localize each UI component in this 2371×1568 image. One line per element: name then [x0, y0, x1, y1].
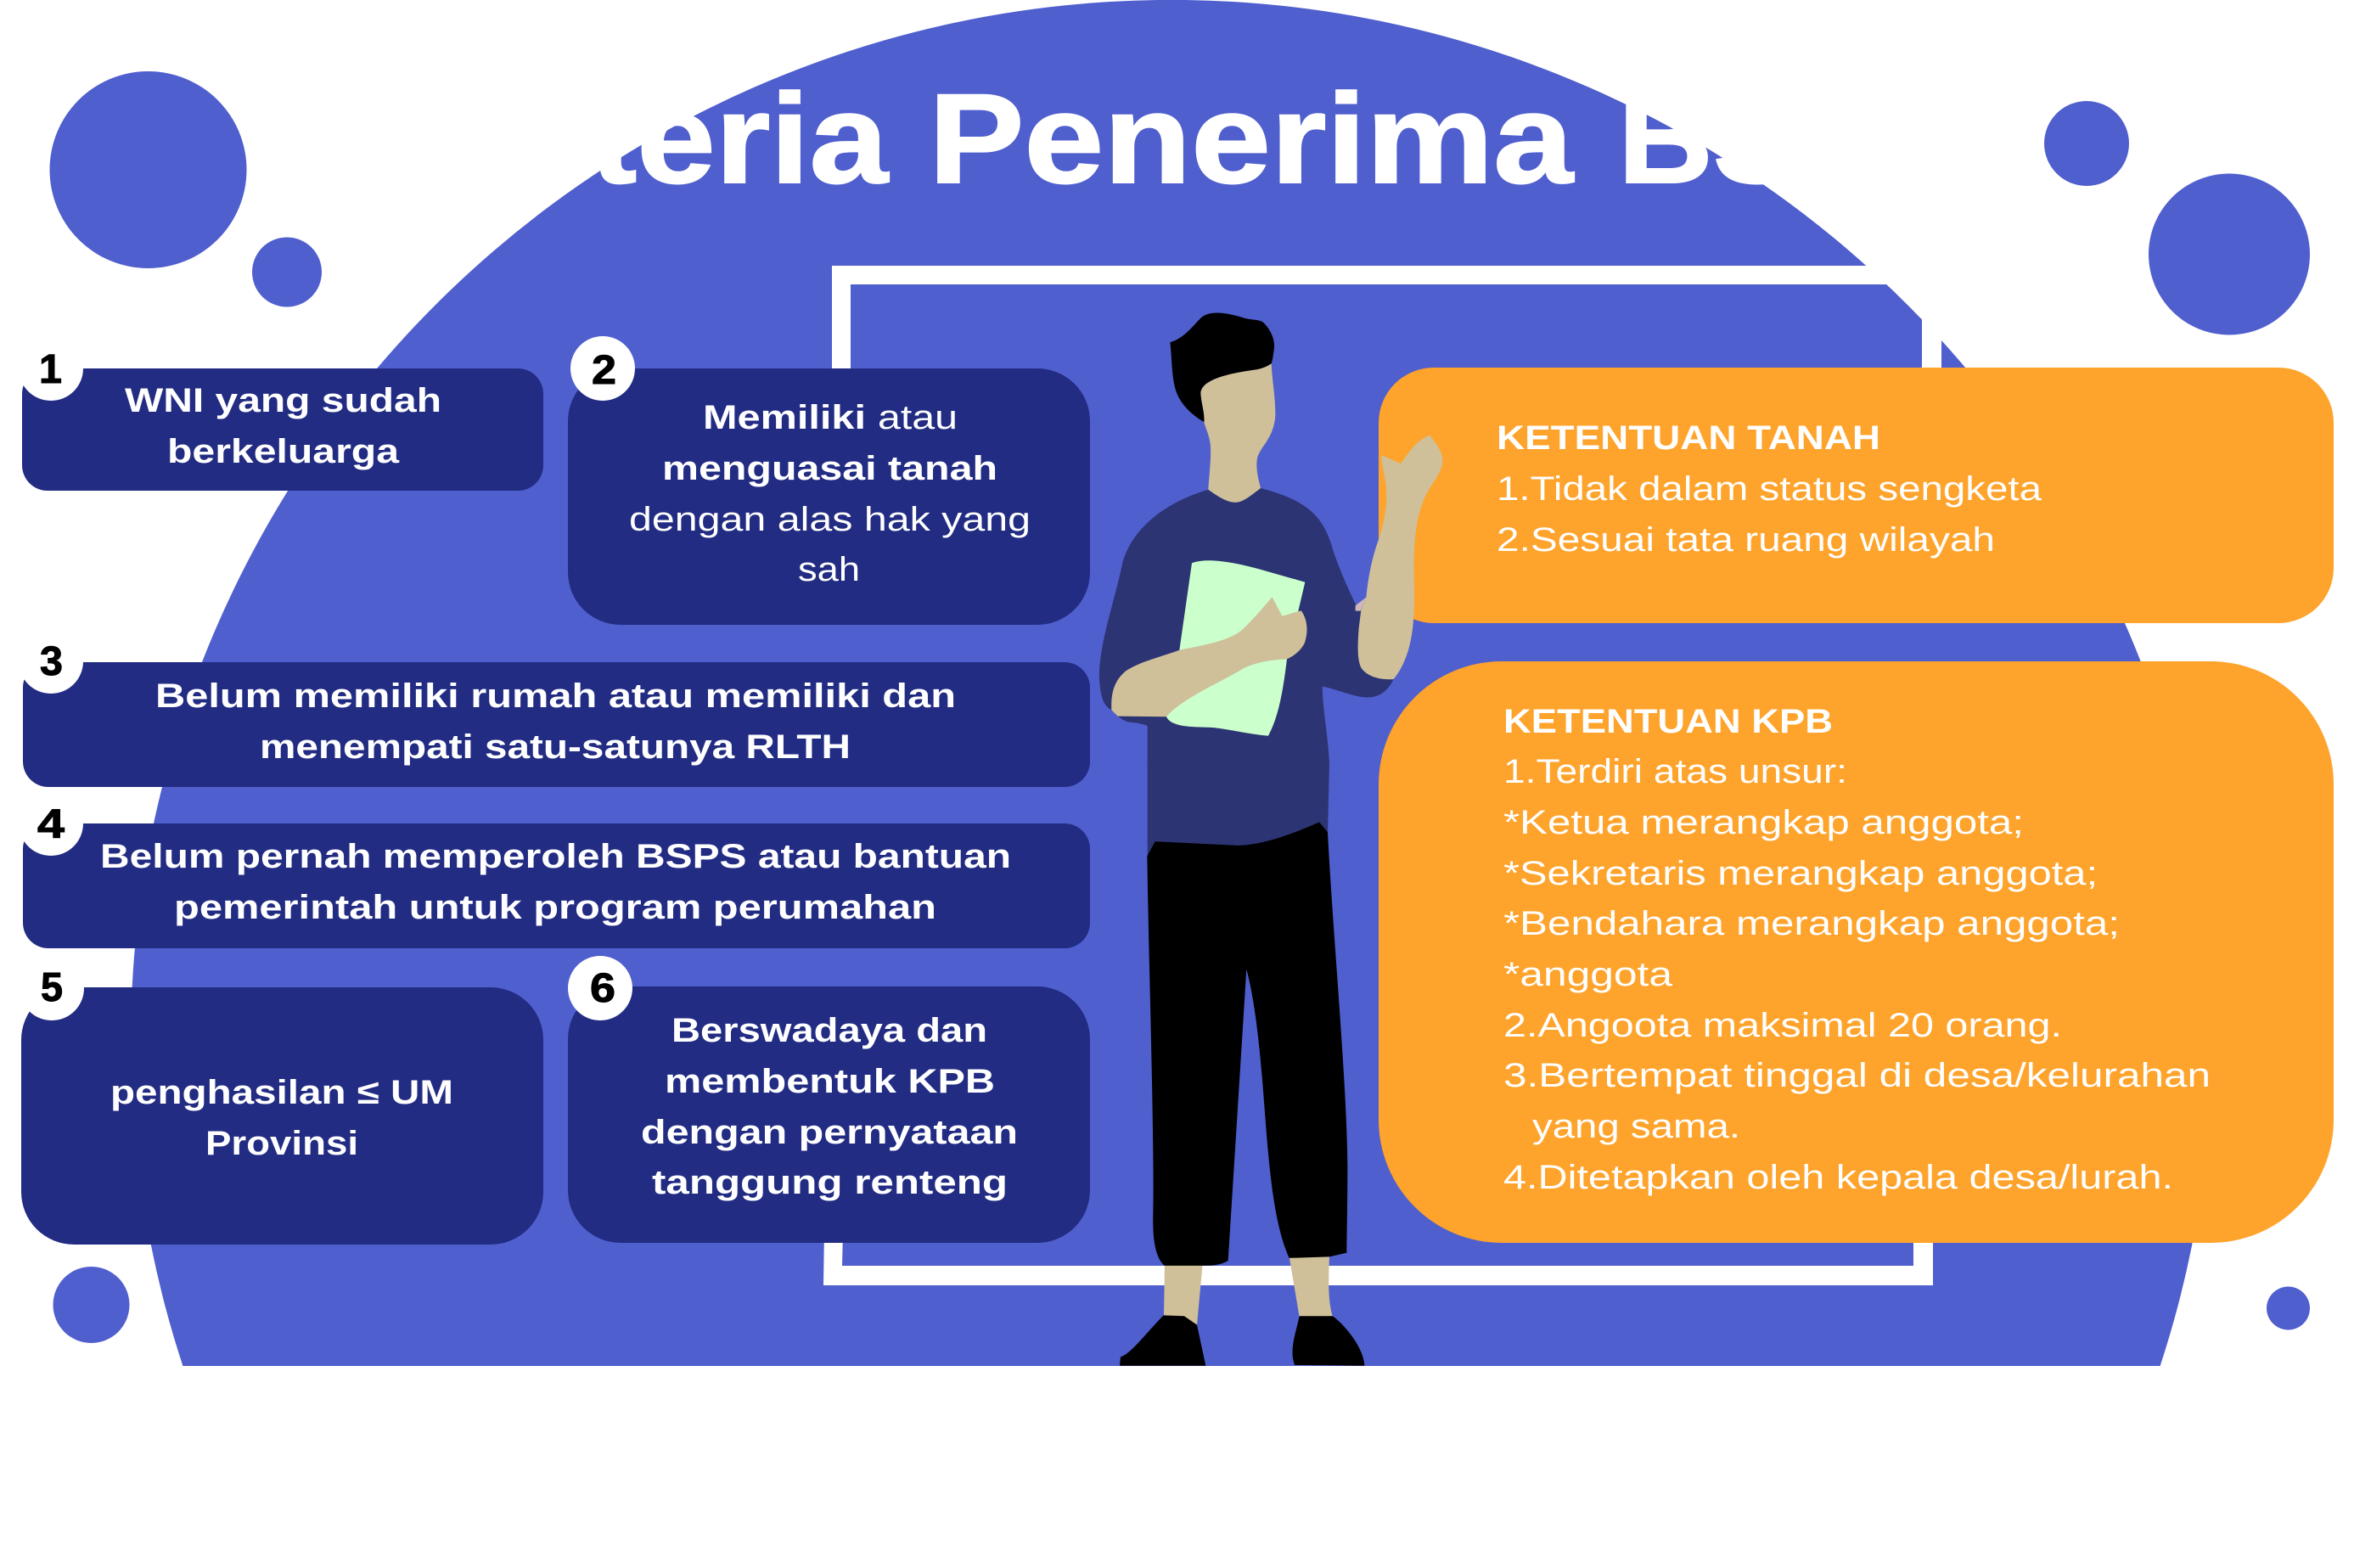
card 2 text: atau [878, 399, 958, 436]
badge 5: 5 [41, 965, 63, 1010]
list: ketentuan kpb: 1.Terdiri atas unsur: [1503, 753, 1847, 790]
card 2 [568, 336, 1090, 625]
badge 6: 6 [590, 966, 615, 1011]
badge 4: 4 [37, 802, 65, 847]
badge 5 [20, 956, 84, 1020]
right arm raised [1358, 435, 1442, 679]
card 3 text: menempati satu-satunya RLTH [260, 728, 851, 766]
card 2 text [629, 399, 1031, 588]
card 4 text: pemerintah untuk program perumahan [174, 889, 936, 926]
card 3 text [155, 677, 956, 766]
card 5 text [110, 1074, 453, 1162]
card 6 [568, 956, 1090, 1243]
card 1 text [125, 382, 441, 470]
shoes [1120, 1315, 1364, 1366]
panel: ketentuan tanah [1379, 368, 2334, 623]
badge 6 [568, 956, 632, 1020]
document [1166, 560, 1305, 736]
list: ketentuan tanah [1497, 470, 2042, 559]
list: ketentuan kpb [1503, 753, 2211, 1196]
title [394, 67, 1976, 210]
list: ketentuan kpb: *Sekretaris merangkap anggota; [1503, 855, 2098, 892]
badge 1: 1 [39, 347, 62, 392]
face and neck [1200, 363, 1275, 503]
list: ketentuan kpb: *anggota [1503, 956, 1673, 993]
card 4 text [100, 838, 1011, 926]
badge 2 [570, 336, 635, 401]
badge 1 [19, 336, 83, 401]
badge 2: 2 [592, 348, 616, 393]
title: Penerima [929, 67, 1575, 210]
figure lower body [1120, 763, 1364, 1366]
figure upper body [1099, 313, 1442, 765]
card 1 [19, 336, 543, 491]
card 3 [19, 629, 1090, 787]
list: ketentuan kpb: 4.Ditetapkan oleh kepala desa/lurah. [1503, 1159, 2173, 1196]
decorative circles [49, 71, 2310, 1343]
card 6 text: Berswadaya dan [671, 1012, 987, 1049]
hair [1170, 313, 1274, 422]
card 2 text: menguasai tanah [662, 450, 997, 487]
background dome [131, 0, 2212, 1366]
list: ketentuan kpb: 3.Bertempat tinggal di desa/kelurahan [1503, 1057, 2211, 1094]
card 6 text [641, 1012, 1018, 1201]
heading: ketentuan tanah: KETENTUAN TANAH [1497, 419, 1880, 457]
legs [1164, 1256, 1333, 1325]
badge 3: 3 [40, 639, 63, 684]
card 5 [20, 956, 543, 1245]
shirt upper part [1099, 488, 1394, 765]
card 2 text: sah [798, 551, 860, 588]
card 2 text: dengan alas hak yang [629, 501, 1031, 538]
list: ketentuan tanah: 2.Sesuai tata ruang wilayah [1497, 521, 1995, 559]
card 5 text: penghasilan ≤ UM [110, 1074, 453, 1111]
card 4 text: Belum pernah memperoleh BSPS atau bantuan [100, 838, 1011, 875]
list: ketentuan kpb: 2.Angoota maksimal 20 orang. [1503, 1007, 2062, 1044]
card 6 text: tanggung renteng [652, 1164, 1008, 1201]
panel: ketentuan kpb [1379, 661, 2334, 1243]
shirt lower part [1148, 763, 1329, 857]
list: ketentuan kpb: yang sama. [1532, 1108, 1740, 1145]
card 3 text: Belum memiliki rumah atau memiliki dan [155, 677, 956, 715]
figure: standing man holding document [1099, 313, 1442, 1366]
card 6 text: dengan pernyataan [641, 1114, 1018, 1151]
list: ketentuan kpb: *Bendahara merangkap anggota; [1503, 905, 2120, 942]
badge 4 [19, 791, 83, 856]
card 4 [19, 791, 1090, 948]
title: BSPS [1618, 67, 1976, 210]
heading: ketentuan kpb: KETENTUAN KPB [1503, 703, 1833, 740]
badge 3 [19, 629, 83, 694]
card 5 text: Provinsi [205, 1125, 358, 1162]
trousers [1147, 822, 1347, 1266]
list: ketentuan tanah: 1.Tidak dalam status sengketa [1497, 470, 2042, 508]
card 1 text: WNI yang sudah [125, 382, 441, 419]
list: ketentuan kpb: *Ketua merangkap anggota; [1503, 804, 2024, 841]
card 1 text: berkeluarga [167, 433, 400, 470]
card 2 text: Memiliki [703, 399, 866, 436]
left arm [1111, 597, 1307, 717]
card 6 text: membentuk KPB [665, 1063, 995, 1100]
thumb [1356, 598, 1366, 611]
white picture frame [823, 266, 1941, 1285]
title: Kriteria [394, 67, 890, 210]
